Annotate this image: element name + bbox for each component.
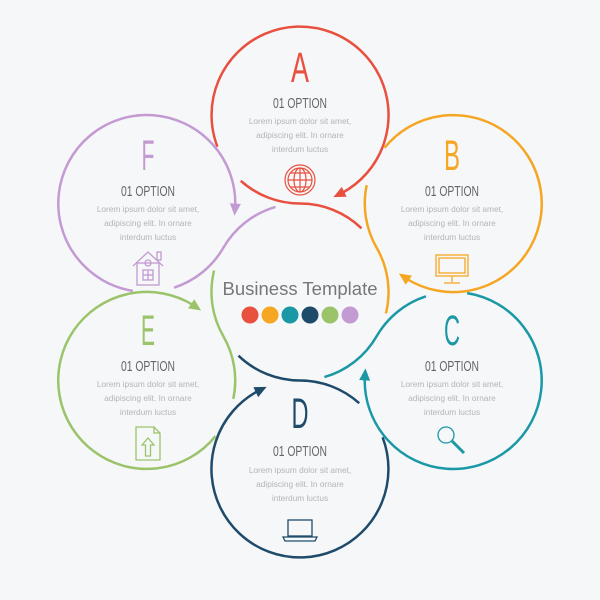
petal A ring: [212, 27, 389, 228]
center title: Business Template: [222, 279, 378, 299]
text C: 01 OPTION: [425, 358, 479, 375]
text D: [249, 390, 351, 503]
text E: [97, 307, 199, 417]
text F: Lorem ipsum dolor sit amet,: [97, 204, 199, 214]
text C: interdum luctus: [424, 407, 480, 417]
text F: 01 OPTION: [121, 183, 175, 200]
text C: adipiscing elit. In ornare: [408, 393, 496, 403]
text D: interdum luctus: [272, 493, 328, 503]
icon: laptop: [283, 520, 317, 541]
text D: D: [292, 390, 308, 438]
text A: 01 OPTION: [273, 95, 327, 112]
text C: Lorem ipsum dolor sit amet,: [401, 379, 503, 389]
text B: 01 OPTION: [425, 183, 479, 200]
petal D ring: [211, 356, 388, 557]
text D: adipiscing elit. In ornare: [256, 479, 344, 489]
color dots: [242, 306, 358, 324]
icon: magnifier: [438, 427, 464, 453]
text F: [97, 132, 199, 242]
icon: monitor: [436, 255, 468, 283]
text B: adipiscing elit. In ornare: [408, 218, 496, 228]
icon: globe: [285, 165, 315, 195]
text C: C: [444, 307, 460, 355]
text A: interdum luctus: [272, 144, 328, 154]
text E: E: [141, 307, 155, 355]
text A: [249, 44, 351, 154]
text B: [401, 132, 503, 242]
text F: adipiscing elit. In ornare: [104, 218, 192, 228]
text C: [401, 307, 503, 417]
text B: interdum luctus: [424, 232, 480, 242]
icon: house: [133, 252, 163, 285]
text A: Lorem ipsum dolor sit amet,: [249, 116, 351, 126]
text E: adipiscing elit. In ornare: [104, 393, 192, 403]
text E: 01 OPTION: [121, 358, 175, 375]
petal B ring: [311, 83, 574, 337]
petal C ring: [311, 247, 574, 501]
text F: interdum luctus: [120, 232, 176, 242]
text B: B: [444, 132, 460, 180]
text D: Lorem ipsum dolor sit amet,: [249, 465, 351, 475]
text A: A: [291, 44, 309, 92]
text D: 01 OPTION: [273, 443, 327, 460]
petal E ring: [26, 247, 289, 501]
text F: F: [142, 132, 154, 180]
text A: adipiscing elit. In ornare: [256, 130, 344, 140]
text B: Lorem ipsum dolor sit amet,: [401, 204, 503, 214]
text E: interdum luctus: [120, 407, 176, 417]
petal F ring: [26, 83, 289, 337]
text E: Lorem ipsum dolor sit amet,: [97, 379, 199, 389]
icon: document upload: [136, 427, 160, 460]
